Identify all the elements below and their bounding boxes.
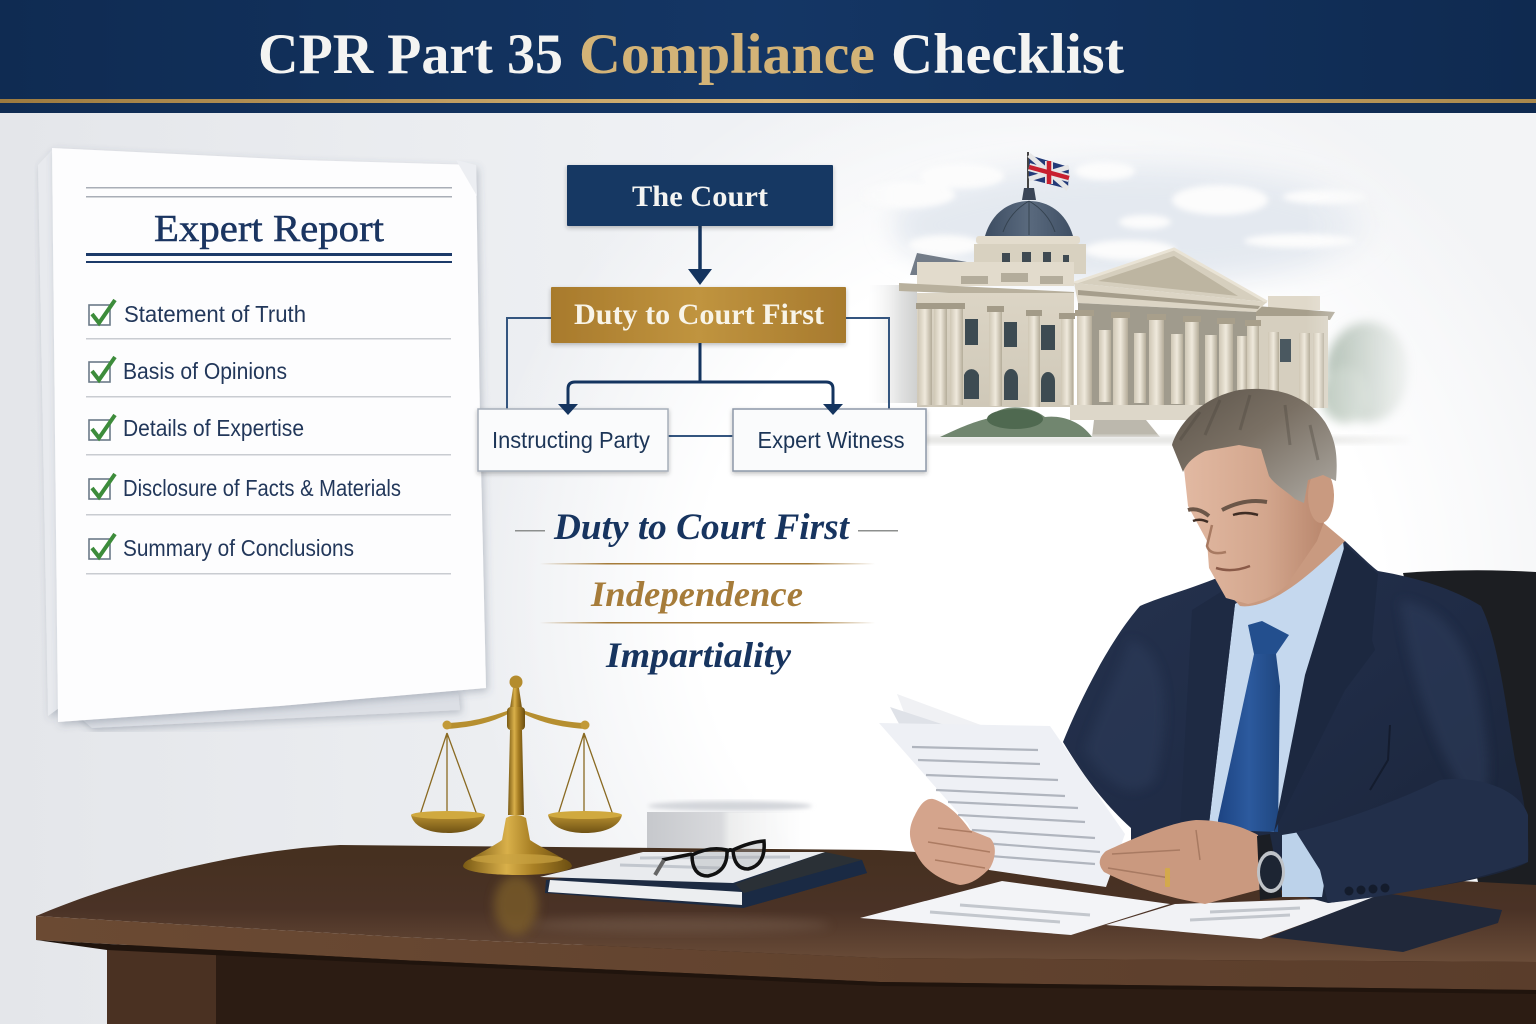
box: instructing party: Instructing Party xyxy=(492,427,650,453)
sky and clouds xyxy=(855,162,1370,285)
title: Checklist xyxy=(891,23,1124,86)
lapels xyxy=(1274,545,1378,832)
held papers xyxy=(879,694,1125,887)
heading: expert report: Expert Report xyxy=(154,208,384,250)
title: CPR Part 35 xyxy=(258,23,563,86)
icon: glasses xyxy=(655,841,764,876)
folder xyxy=(1269,893,1502,952)
eyes and brows xyxy=(1188,501,1267,516)
box: duty to court first xyxy=(551,287,846,343)
cuff xyxy=(1282,832,1325,897)
flowchart xyxy=(478,165,926,471)
dome xyxy=(974,188,1086,274)
box: instructing party xyxy=(478,409,668,471)
hedges and ground xyxy=(920,407,1410,444)
tree xyxy=(1321,322,1410,423)
checklist item: summary of conclusions: Summary of Conclusions xyxy=(123,535,354,561)
checklist item: disclosure of facts and materials: Disclosure of Facts & Materials xyxy=(123,475,401,501)
checklist item: statement of truth: Statement of Truth xyxy=(124,301,306,327)
header banner xyxy=(0,0,1536,113)
right hand xyxy=(1100,820,1262,904)
left hand xyxy=(910,799,995,885)
principle: duty to court first: Duty to Court First xyxy=(553,507,851,548)
panel: expert report document xyxy=(38,148,486,728)
arrows: duty to parties xyxy=(558,343,843,415)
neck xyxy=(1225,520,1345,606)
icon: scales of justice xyxy=(411,676,622,875)
icon: wrist watch xyxy=(1257,834,1285,900)
book with papers xyxy=(540,841,867,908)
connector lines xyxy=(507,318,889,436)
tie xyxy=(1218,621,1289,832)
arrow: court to duty xyxy=(688,226,712,285)
principle: impartiality: Impartiality xyxy=(605,635,792,675)
principles text xyxy=(515,507,898,675)
faded far-left wing xyxy=(868,285,917,403)
box: expert witness xyxy=(733,409,926,471)
flag xyxy=(1027,152,1069,189)
right wing xyxy=(1256,296,1335,408)
title: Compliance xyxy=(579,23,875,86)
box: the court xyxy=(567,165,833,226)
office chair xyxy=(1403,570,1536,890)
desk xyxy=(36,845,1536,1024)
portico xyxy=(1070,249,1290,437)
box: duty to court first: Duty to Court First xyxy=(574,298,824,331)
checklist item: details of expertise: Details of Expertise xyxy=(123,415,304,441)
principle: independence: Independence xyxy=(590,574,803,614)
forearm sleeve xyxy=(1296,779,1528,903)
shirt xyxy=(1209,541,1345,832)
box: the court: The Court xyxy=(632,180,768,213)
head xyxy=(1172,389,1337,604)
background box behind desk xyxy=(647,801,812,848)
left wing xyxy=(899,253,1075,407)
courthouse illustration xyxy=(855,152,1410,444)
box: expert witness: Expert Witness xyxy=(758,427,904,453)
nose and mouth xyxy=(1207,525,1226,553)
man reading report xyxy=(879,389,1528,904)
checklist item: basis of opinions: Basis of Opinions xyxy=(123,358,287,384)
papers flat on desk xyxy=(860,881,1502,952)
suit xyxy=(1063,541,1528,903)
suit shoulder highlight xyxy=(1400,600,1488,800)
